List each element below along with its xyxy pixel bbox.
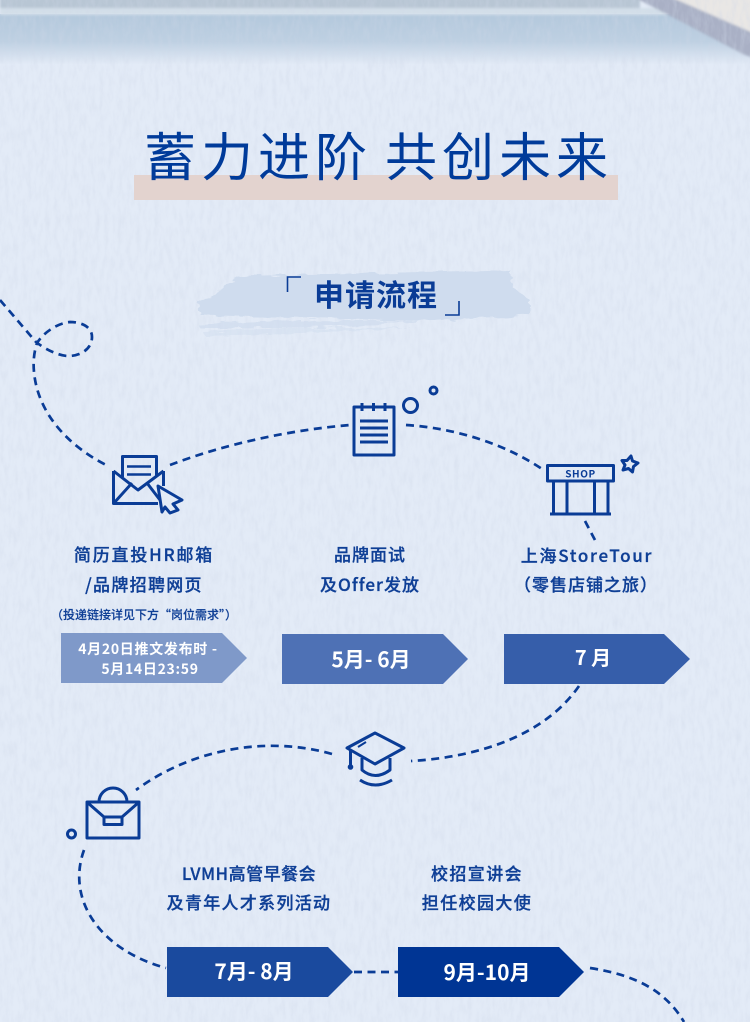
icon: envelope with cursor: [114, 456, 182, 513]
heading bracket left: [288, 277, 301, 292]
title: 蓄力进阶: [144, 116, 372, 191]
arrow: April to May: 4月20日推文发布时 -: [78, 639, 218, 659]
step three text: （零售店铺之旅）: [514, 571, 658, 596]
icon: large circle: [404, 398, 418, 412]
dashed path: loop into mail: [0, 300, 108, 466]
step five text: 担任校园大使: [422, 889, 532, 914]
icon: notepad: [354, 403, 394, 455]
arrow: May to June: 5月- 6月: [331, 644, 411, 674]
step one text: （投递链接详见下方“岗位需求”）: [51, 606, 237, 623]
icon: small circle near bag: [68, 830, 76, 838]
arrow: May to June: [282, 634, 468, 684]
step three text: [514, 542, 658, 596]
brush stroke behind section heading: [198, 270, 530, 336]
step five text: [422, 860, 532, 914]
arrow: September to October: [398, 947, 584, 997]
step two text: 品牌面试: [334, 541, 406, 566]
step one text: /品牌招聘网页: [85, 571, 203, 596]
arrow: April to May: [61, 633, 247, 683]
arrow: April to May: 5月14日23:59: [101, 659, 199, 679]
icon: star: [622, 456, 638, 472]
icon: small circle: [430, 387, 437, 394]
title part two: 共创未来: [385, 116, 613, 191]
icon: graduation cap: [347, 733, 404, 785]
step four text: 及青年人才系列活动: [167, 889, 331, 914]
dashed path: shop to text: [585, 521, 596, 542]
icon: shop: [548, 466, 614, 514]
step four text: [167, 860, 331, 914]
step two text: 及Offer发放: [320, 571, 420, 596]
arrow: July to August: 7月- 8月: [214, 956, 294, 986]
step three text: 上海StoreTour: [521, 542, 653, 567]
dashed path: notepad to shop: [406, 425, 542, 469]
dashed path: mail to notepad: [170, 425, 350, 465]
dashed path: arrow to cap: [411, 686, 579, 761]
step four text: LVMH高管早餐会: [182, 860, 316, 885]
arrow: July to August: [167, 947, 353, 997]
dashed path: bag to arrow: [79, 850, 166, 968]
step one text: [51, 541, 237, 623]
dashed path: between arrows: [354, 971, 398, 973]
title underline bar: [134, 175, 618, 200]
arrow: July: [504, 634, 690, 684]
icon: shop: SHOP: [565, 466, 596, 480]
step five text: 校招宣讲会: [431, 860, 523, 885]
heading bracket right: [445, 301, 459, 315]
arrow: July: 7 月: [575, 642, 611, 671]
dashed path: cap to bag: [136, 746, 332, 790]
dashed path: exit bottom right: [590, 968, 684, 1022]
section heading: 申请流程: [314, 271, 438, 315]
step two text: [320, 541, 420, 596]
icon: bag: [87, 788, 139, 838]
arrow: September to October: 9月-10月: [444, 957, 530, 987]
step one text: 简历直投HR邮箱: [74, 541, 214, 566]
